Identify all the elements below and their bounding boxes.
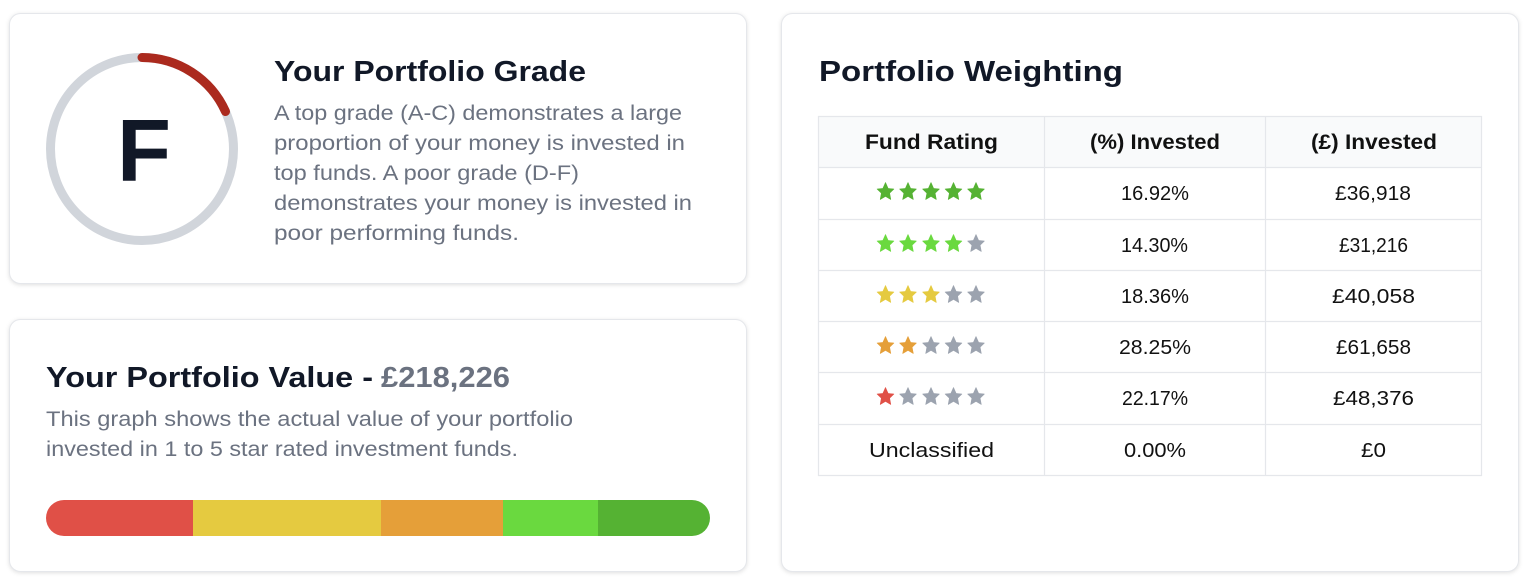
row: unclassified: Unclassified [869, 439, 994, 462]
text block: graph explanation: invested in 1 to 5 star rated investment funds. [46, 438, 518, 461]
heading: your portfolio grade: Your Portfolio Grade [274, 56, 586, 88]
table: fund rating weighting [818, 116, 1482, 476]
row: 2 stars [877, 336, 1411, 359]
panel: portfolio value [10, 320, 746, 572]
heading: your portfolio value: £218,226 [381, 362, 510, 394]
row: 4 stars: £31,216 [1339, 234, 1408, 257]
row: 5 stars: £36,918 [1335, 182, 1411, 205]
row: 1 star: 22.17% [1122, 387, 1188, 410]
table header [865, 131, 1437, 154]
row: unclassified [869, 439, 1386, 462]
table header: (%) Invested [1090, 131, 1220, 154]
text block: grade explanation: demonstrates your money is invested in [274, 192, 692, 215]
row: unclassified: 0.00% [1124, 439, 1186, 462]
panel: portfolio grade [10, 14, 746, 284]
icon: grade ring [50, 57, 234, 240]
heading: your portfolio value: Your Portfolio Value - [46, 362, 373, 394]
row: 2 stars: 28.25% [1119, 336, 1191, 359]
row: 3 stars: £40,058 [1332, 285, 1415, 308]
text block: graph explanation [46, 408, 573, 461]
row: 2 stars: £61,658 [1336, 336, 1411, 359]
row: 1 star: £48,376 [1333, 387, 1414, 410]
row: 3 stars: 18.36% [1121, 285, 1189, 308]
row: 4 stars [877, 234, 1408, 257]
row: 5 stars: 16.92% [1121, 182, 1189, 205]
row: 5 stars [877, 182, 1411, 205]
table header: (£) Invested [1311, 131, 1437, 154]
row: 3 stars [877, 285, 1415, 308]
table header: Fund Rating [865, 131, 998, 154]
text block: grade explanation: top funds. A poor grade (D-F) [274, 162, 579, 185]
text block: grade explanation: proportion of your money is invested in [274, 132, 685, 155]
icon: grade ring: F [117, 101, 171, 200]
text block: grade explanation: poor performing funds. [274, 222, 519, 245]
text block: grade explanation [274, 102, 692, 245]
row: 4 stars: 14.30% [1121, 234, 1188, 257]
heading: your portfolio value [46, 362, 510, 394]
panel: portfolio weighting [782, 14, 1518, 572]
chart: stacked value bar [46, 500, 710, 536]
text block: graph explanation: This graph shows the actual value of your portfolio [46, 408, 573, 431]
row: unclassified: £0 [1361, 439, 1386, 462]
text block: grade explanation: A top grade (A-C) demonstrates a large [274, 102, 682, 125]
row: 1 star [877, 387, 1414, 410]
heading: portfolio weighting: Portfolio Weighting [819, 56, 1123, 88]
